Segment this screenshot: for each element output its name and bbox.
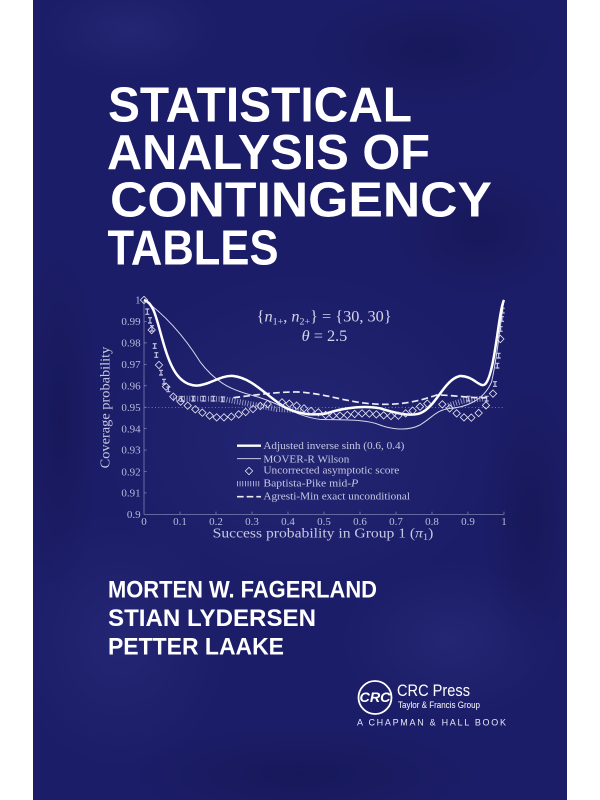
parameter annotation: 1+ bbox=[273, 317, 283, 327]
x axis title: 1 bbox=[423, 532, 428, 542]
x axis title: ) bbox=[428, 525, 433, 541]
x axis tick labels: 0.8 bbox=[425, 516, 439, 528]
x axis tick labels: 0.1 bbox=[173, 516, 187, 528]
parameter annotation bbox=[257, 309, 392, 345]
y axis tick labels bbox=[121, 295, 141, 521]
y axis tick labels: 0.91 bbox=[121, 488, 141, 500]
x axis tick labels: 0.2 bbox=[209, 516, 223, 528]
legend: Adjusted inverse sinh (0.6, 0.4) bbox=[263, 441, 405, 452]
adjusted inverse sinh series bbox=[144, 300, 504, 415]
y axis tick labels: 0.98 bbox=[121, 337, 141, 349]
reference line 0.95 bbox=[145, 406, 504, 408]
x axis tick labels: 0.4 bbox=[281, 516, 295, 528]
publisher group: Taylor & Francis Group bbox=[398, 700, 480, 710]
imprint line: A CHAPMAN & HALL BOOK bbox=[357, 718, 506, 728]
MOVER-R Wilson series bbox=[144, 300, 504, 429]
y axis tick labels: 0.97 bbox=[121, 359, 141, 371]
legend: MOVER-R Wilson bbox=[263, 454, 350, 465]
y axis tick labels: 0.9 bbox=[127, 509, 141, 521]
coverage probability chart bbox=[97, 295, 507, 542]
parameter annotation: 2+ bbox=[300, 317, 310, 327]
legend: Uncorrected asymptotic score bbox=[263, 466, 400, 477]
authors: STIAN LYDERSEN bbox=[108, 605, 316, 632]
title bbox=[107, 79, 492, 275]
y axis tick labels: 1 bbox=[135, 295, 141, 307]
x axis tick labels: 0 bbox=[141, 516, 147, 528]
title: TABLES bbox=[108, 221, 278, 275]
y axis tick labels: 0.95 bbox=[121, 402, 141, 414]
Baptista-Pike series bbox=[145, 308, 505, 411]
uncorrected asymptotic score markers bbox=[140, 296, 504, 421]
x axis tick labels: 0.5 bbox=[317, 516, 331, 528]
y axis tick labels: 0.96 bbox=[121, 380, 141, 392]
publisher name: CRC Press bbox=[397, 681, 470, 700]
x axis tick labels: 0.7 bbox=[389, 516, 403, 528]
parameter annotation: {n bbox=[257, 309, 272, 326]
icon: CRC circle bbox=[358, 681, 392, 714]
authors bbox=[108, 577, 377, 660]
icon: CRC circle: CRC bbox=[360, 689, 391, 705]
x axis tick labels: 0.9 bbox=[461, 516, 475, 528]
title: ANALYSIS OF bbox=[107, 126, 430, 180]
parameter annotation: n bbox=[291, 309, 300, 326]
y axis tick labels: 0.99 bbox=[121, 316, 141, 328]
Agresti-Min dashed series bbox=[233, 392, 487, 404]
axes bbox=[144, 300, 504, 514]
publisher logo bbox=[357, 681, 506, 728]
title: STATISTICAL bbox=[108, 79, 412, 133]
x axis title: Success probability in Group 1 ( π bbox=[213, 525, 422, 540]
authors: MORTEN W. FAGERLAND bbox=[108, 577, 377, 604]
legend: Agresti-Min exact unconditional bbox=[263, 492, 410, 503]
legend bbox=[237, 441, 410, 503]
y axis tick labels: 0.93 bbox=[121, 445, 141, 457]
title: CONTINGENCY bbox=[110, 174, 492, 228]
x axis tick labels: 0.3 bbox=[245, 516, 259, 528]
x axis tick labels bbox=[141, 516, 507, 528]
y axis title: Coverage probability bbox=[97, 346, 112, 468]
authors: PETTER LAAKE bbox=[108, 633, 284, 660]
parameter annotation: θ = 2.5 bbox=[302, 328, 348, 345]
y axis tick labels: 0.92 bbox=[121, 466, 141, 478]
parameter annotation: , bbox=[283, 309, 291, 326]
x axis tick labels: 0.6 bbox=[353, 516, 367, 528]
legend: Baptista-Pike mid-P bbox=[263, 479, 359, 490]
y axis tick labels: 0.94 bbox=[121, 423, 141, 435]
parameter annotation: } = {30, 30} bbox=[310, 309, 392, 326]
x axis tick labels: 1 bbox=[501, 516, 507, 528]
